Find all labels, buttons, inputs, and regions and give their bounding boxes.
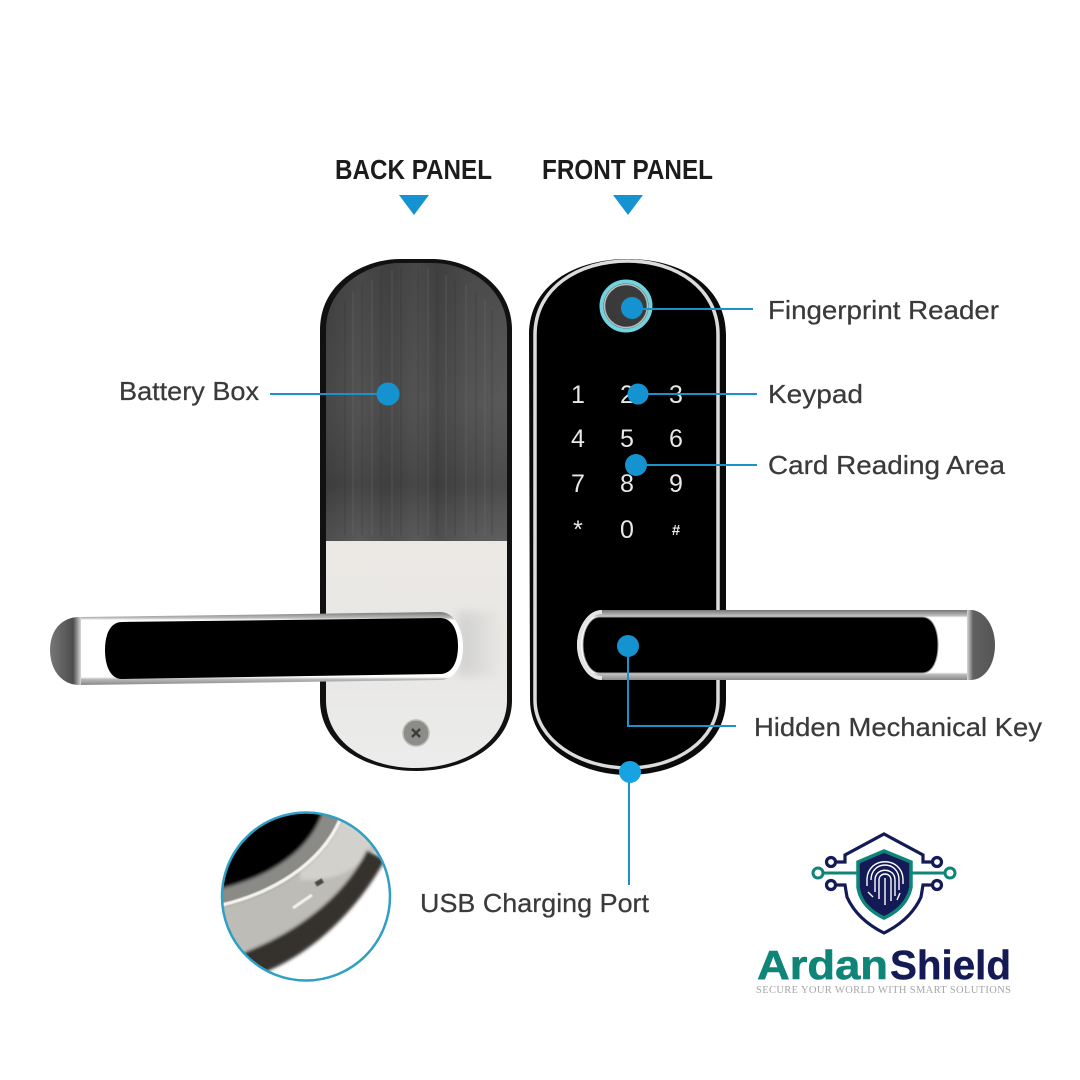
callout: card reading area: Card Reading Area (768, 450, 1006, 480)
keypad digits: 3 (669, 381, 683, 409)
keypad digits: 7 (571, 470, 585, 498)
logo: ArdanShield: SECURE YOUR WORLD WITH SMART SOLUTIONS (756, 985, 1011, 996)
callout: hidden mechanical key (617, 635, 1042, 742)
keypad digits: 4 (571, 425, 585, 453)
callout: fingerprint reader: Fingerprint Reader (768, 295, 999, 325)
callout: usb charging port: USB Charging Port (420, 888, 650, 918)
callout: card reading area (625, 450, 1006, 480)
callout: keypad: Keypad (768, 379, 863, 409)
callout: keypad (628, 379, 863, 409)
logo: ArdanShield: Ardan (757, 942, 888, 988)
keypad digits: 5 (620, 425, 634, 453)
callout: battery box (119, 376, 400, 406)
heading: back panel (335, 154, 492, 215)
keypad digits: 8 (620, 470, 634, 498)
panel: front lock plate (529, 259, 726, 775)
inset: usb port close-up (220, 811, 392, 982)
left door handle (50, 612, 463, 685)
keypad digits: 2 (620, 381, 634, 409)
keypad digits: 6 (669, 425, 683, 453)
panel: back lock plate (320, 259, 512, 771)
heading: front panel (542, 154, 713, 215)
callout: battery box: Battery Box (119, 376, 259, 406)
callout: fingerprint reader (621, 295, 999, 325)
keypad digits: 1 (571, 381, 585, 409)
icon: fingerprint reader ring (602, 282, 650, 330)
heading: back panel: BACK PANEL (335, 154, 492, 185)
keypad digits: 9 (669, 470, 683, 498)
icon: screw (403, 720, 429, 746)
keypad digits: # (672, 522, 681, 539)
right door handle (577, 610, 995, 680)
callout: usb charging port (420, 761, 650, 918)
logo: ArdanShield (756, 834, 1011, 996)
icon: shield emblem (813, 834, 955, 933)
keypad digits: 0 (620, 516, 634, 544)
keypad digits: * (573, 516, 583, 544)
keypad digits (571, 381, 683, 544)
heading: front panel: FRONT PANEL (542, 154, 713, 185)
callout: hidden mechanical key: Hidden Mechanical Key (754, 712, 1042, 742)
logo: ArdanShield: Shield (890, 942, 1011, 988)
